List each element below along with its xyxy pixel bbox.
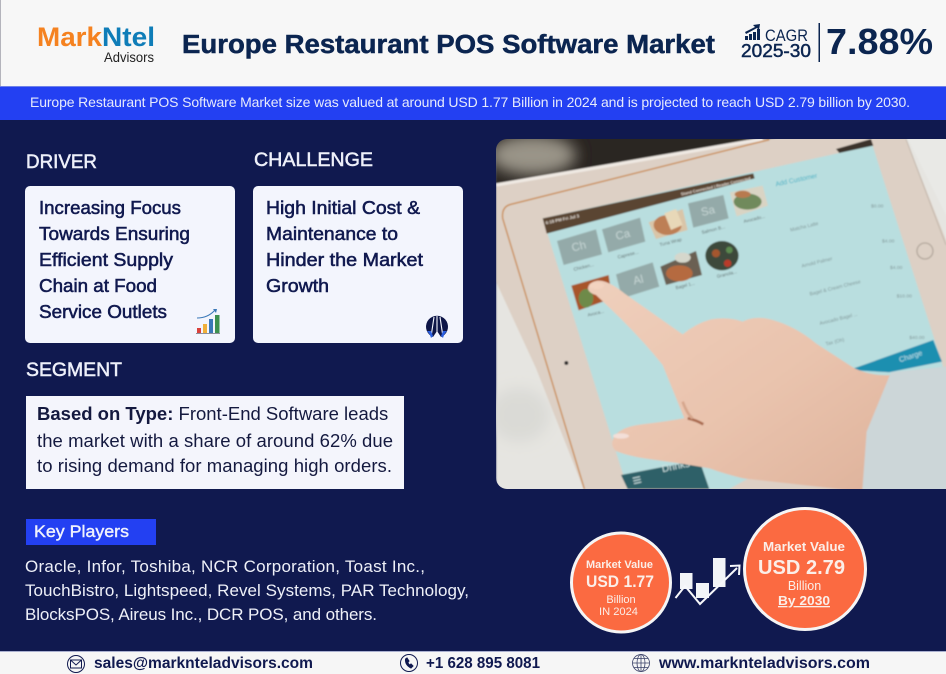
summary band: Europe Restaurant POS Software Market size was valued at around USD 1.77 Billion in 2024 and is projected to reach USD 2.79 billion by 2030. (30, 94, 910, 110)
menu tiles: Salmon B... (701, 224, 726, 235)
menu tiles: Ca (614, 228, 632, 243)
menu tiles: Avoca... (587, 309, 604, 318)
icon: growth bars (745, 24, 760, 40)
CAGR block: 2025-30 (741, 41, 811, 61)
logo: Ntel (102, 22, 155, 52)
driver text: Increasing Focus (39, 197, 181, 218)
sleeve (862, 367, 946, 495)
website: www.marknteladvisors.com (658, 655, 870, 672)
market value 2024 circle: USD 1.77 (586, 572, 654, 591)
icon: globe (632, 654, 650, 672)
tablet screen: Drinks (661, 459, 691, 475)
order list: $0.00 (871, 204, 884, 210)
challenge text (266, 197, 423, 296)
menu tiles: Ch (570, 239, 587, 255)
logo: Mark (37, 22, 103, 52)
segment text (37, 403, 393, 476)
driver text: Service Outlets (39, 301, 167, 322)
footer bar (0, 651, 946, 674)
email address: sales@marknteladvisors.com (94, 655, 313, 672)
order list: Tax (Oh) (825, 337, 845, 348)
key players tag (26, 519, 156, 545)
driver text: Towards Ensuring (39, 223, 190, 244)
tablet body (496, 135, 946, 495)
driver text: Efficient Supply (39, 249, 174, 270)
tablet screen: Stand Connected | Reader Connected (680, 176, 752, 197)
heading: driver: DRIVER (26, 152, 97, 173)
menu tiles: Sa (700, 204, 717, 219)
order list: $10.00 (897, 294, 912, 300)
order list (790, 204, 925, 348)
heading: challenge: CHALLENGE (254, 150, 373, 171)
market value 2024 circle (572, 533, 670, 632)
order list: $4.00 (890, 265, 903, 271)
logo: Advisors (104, 49, 154, 65)
key players tag: Key Players (34, 522, 129, 541)
heading: segment: SEGMENT (26, 360, 122, 381)
photo background (496, 139, 776, 440)
menu tiles: Granola... (716, 269, 737, 279)
market value 2024 circle: Billion (606, 594, 636, 606)
tablet screen: Add Customer (775, 172, 819, 188)
photo: finger touching POS tablet (489, 135, 946, 495)
order list: $40.00 (909, 335, 925, 341)
icon: email (68, 656, 84, 672)
order list: Bagel & Cream Cheese (809, 279, 861, 298)
menu tiles: Tuna Wrap (659, 237, 683, 247)
icon: phone (400, 654, 418, 672)
hand (588, 281, 891, 492)
market value 2030 circle: By 2030 (778, 593, 830, 608)
menu tiles: Al (632, 273, 645, 288)
challenge text: Growth (266, 275, 329, 296)
order list: Matcha Latte (790, 221, 819, 234)
logo (37, 22, 155, 65)
market value 2024 circle: Market Value (586, 559, 653, 571)
menu tiles: Chicken... (573, 262, 594, 272)
menu tiles: Avocado... (743, 214, 765, 224)
segment text: Based on Type: Front-End Software leads (37, 403, 388, 424)
tablet screen: Charge (898, 348, 923, 364)
CAGR block: CAGR (765, 26, 808, 45)
CAGR block: 7.88% (826, 21, 933, 62)
market value 2030 circle: Billion (788, 579, 821, 593)
key players list: Oracle, Infor, Toshiba, NCR Corporation, Toast Inc., (25, 557, 425, 576)
menu tiles: Bagel 1... (675, 281, 695, 290)
challenge text: High Initial Cost & (266, 197, 421, 218)
market value 2030 circle: Market Value (763, 539, 845, 554)
header bar (0, 0, 946, 86)
segment text: the market with a share of around 62% due (37, 430, 393, 451)
menu tiles: Caprese... (617, 250, 639, 260)
key players list: TouchBistro, Lightspeed, Revel Systems, PAR Technology, (25, 581, 469, 600)
icon: rising bar chart (196, 309, 220, 334)
order list: Avocado Bagel ... (819, 312, 858, 327)
order list: Arnold Palmer (801, 256, 833, 270)
title: Europe Restaurant POS Software Market (182, 31, 716, 59)
market value 2024 circle: IN 2024 (599, 606, 638, 618)
key players list: BlocksPOS, Aireus Inc., DCR POS, and others. (25, 605, 377, 624)
challenge text: Hinder the Market (266, 249, 423, 270)
challenge text: Maintenance to (266, 223, 398, 244)
driver text (39, 197, 190, 322)
menu tiles (557, 186, 768, 318)
icon: growth arrow with bars (676, 558, 740, 604)
panel: driver (25, 186, 235, 343)
order list: $4.00 (882, 238, 895, 244)
summary band (0, 86, 946, 120)
CAGR block (741, 21, 933, 62)
panel: challenge (253, 186, 463, 343)
market value 2030 circle: USD 2.79 (758, 557, 845, 579)
segment text: to rising demand for managing high orders. (37, 455, 392, 476)
tablet screen: 6:18 PM Fri Jul 3 (545, 213, 580, 225)
driver text: Chain at Food (39, 275, 157, 296)
market value 2030 circle (744, 508, 866, 630)
icon: road circle (426, 316, 448, 338)
panel: segment (26, 396, 404, 489)
tablet screen (543, 139, 943, 489)
phone number: +1 628 895 8081 (426, 655, 540, 672)
key players list (25, 557, 469, 624)
